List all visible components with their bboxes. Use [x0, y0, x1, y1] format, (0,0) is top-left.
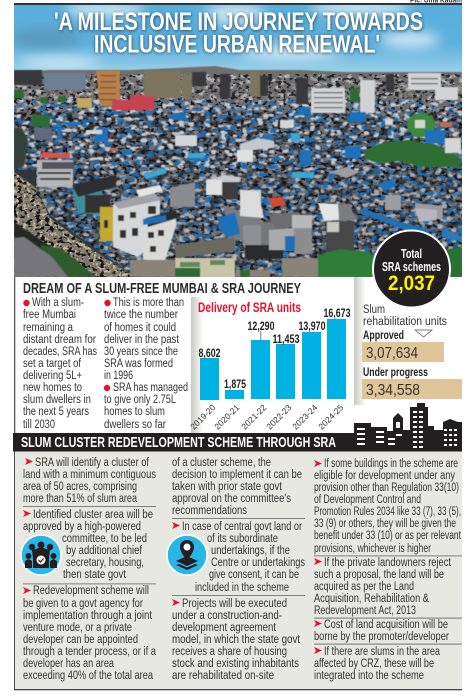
- bar values: [198, 308, 350, 391]
- column 1 text: through a tender process, or if a: [23, 646, 156, 658]
- text block: delivery so far: twice the number: [104, 309, 178, 321]
- column 2 text: undertakings, if the: [211, 545, 290, 557]
- arrow bullet: [25, 458, 33, 465]
- icon: city skyline: [354, 403, 462, 452]
- photo: Mumbai slum skyline: [10, 0, 462, 278]
- blue patches: [57, 107, 445, 165]
- year labels: 2024-25: [316, 402, 346, 431]
- column 1 text: venture mode, or a private: [23, 622, 132, 634]
- text block: slum-free target: distant dream for: [23, 334, 96, 346]
- stat: under progress: [362, 367, 462, 399]
- text block: delivery so far: in 1996: [104, 370, 133, 382]
- column 2 text: give consent, it can be: [209, 569, 299, 581]
- stat: approved: 3,07,634: [366, 345, 418, 362]
- column 1 text: [23, 457, 156, 682]
- column 1 text: implementation through a joint: [23, 610, 153, 622]
- column 3 text: Acquisition, Rehabilitation &: [314, 593, 429, 605]
- column 1 text: committee, to be led: [62, 533, 147, 545]
- text block: slum-free target: the next 5 years: [23, 406, 89, 418]
- bars: [200, 319, 346, 400]
- chart title: Delivery of SRA units: [198, 300, 301, 315]
- bar values: 8,602: [198, 348, 220, 360]
- column 2 text: taken with prior state govt: [172, 481, 283, 493]
- column 2 text: receives a share of housing: [172, 646, 287, 658]
- text block: delivery so far: [104, 297, 188, 431]
- column 1 text: be given to a govt agency for: [23, 598, 143, 610]
- text block: delivery so far: dwellers so far: [104, 419, 166, 431]
- text: slum rehabilitation units: Slum: [363, 304, 385, 316]
- column 1 text: developer can be appointed: [23, 634, 138, 646]
- column 2 text: Centre or undertakings: [211, 557, 305, 569]
- text block: delivery so far: deliver in the past: [104, 334, 180, 346]
- text block: delivery so far: homes to slum: [104, 406, 165, 418]
- column 1 text: Redevelopment scheme will: [33, 585, 149, 597]
- column 2 text: under a construction-and-: [172, 610, 282, 622]
- year labels: 2021-22: [239, 402, 269, 431]
- column 2 text: development agreement: [172, 622, 277, 634]
- column 3 text: [314, 458, 462, 682]
- bar values: 13,970: [298, 321, 326, 333]
- section header bar: [13, 433, 354, 452]
- column 3 text: acquired as per the Land: [314, 581, 414, 593]
- column 3 text: If there are slums in the area: [324, 646, 440, 658]
- year labels: 2019-20: [188, 402, 218, 431]
- column 1 text: area of 50 acres, comprising: [23, 481, 137, 493]
- bar values: 12,290: [248, 321, 274, 333]
- column 3 text: provisions, whichever is higher: [314, 543, 431, 555]
- column 2 text: included in the scheme: [195, 582, 289, 594]
- text block: slum-free target: remaining a: [23, 322, 73, 334]
- year labels: 2020-21: [212, 402, 242, 431]
- text: slum rehabilitation units: rehabilitation units: [363, 316, 447, 328]
- panel: scheme details background: [15, 451, 462, 689]
- text block: delivery so far: SRA has managed: [113, 382, 188, 394]
- column 2 text: of a cluster scheme, the: [172, 457, 271, 469]
- text block: slum-free target: [23, 297, 97, 431]
- column 3 text: Redevelopment Act, 2013: [314, 605, 416, 617]
- left bank: [14, 172, 135, 277]
- leader line: [260, 331, 262, 340]
- column 2 text: model, in which the state govt: [172, 634, 301, 646]
- main white buildings: [113, 197, 160, 257]
- column 1 text: more than 51% of slum area: [23, 493, 137, 505]
- distant towers: [14, 70, 394, 104]
- icon: down triangle: [415, 330, 432, 337]
- text block: delivery so far: This is more than: [113, 297, 184, 309]
- column 1 text: secretary, housing,: [66, 557, 144, 569]
- text block: slum-free target: delivering 5L+: [23, 370, 82, 382]
- badge: total SRA schemes: Total: [401, 247, 422, 261]
- column 1 text: developer has an area: [23, 658, 114, 670]
- panel shading: chart: [191, 297, 203, 433]
- year labels: [188, 402, 346, 431]
- column 2 text: decision to implement it can be: [172, 469, 302, 481]
- column 1 text: SRA will identify a cluster of: [35, 457, 150, 469]
- section header bar: SLUM CLUSTER REDEVELOPMENT SCHEME THROUGH SRA: [21, 434, 336, 451]
- column 2 text: are rehabilitated on-site: [172, 670, 274, 682]
- left frame line: [14, 277, 15, 690]
- icon: map pin: [167, 535, 207, 575]
- panel shading: units: [354, 277, 366, 405]
- column 3 text: of Development Control and: [314, 494, 421, 506]
- column 3 text: affected by CRZ, these will be: [314, 658, 434, 670]
- trees upper: [14, 88, 359, 127]
- text block: slum-free target: decades, SRA has: [23, 346, 97, 358]
- title: INCLUSIVE URBAN RENEWAL': [94, 31, 380, 59]
- heading: slum-free Mumbai: DREAM OF A SLUM-FREE MUMBAI & SRA JOURNEY: [23, 281, 301, 297]
- text block: slum-free target: till 2030: [23, 419, 55, 431]
- badge: total SRA schemes: [373, 230, 450, 308]
- text: slum rehabilitation units: [363, 304, 447, 328]
- bar chart: delivery of SRA units: [188, 300, 350, 431]
- column 1 text: by additional chief: [66, 545, 143, 557]
- text block: delivery so far: 30 years since the: [104, 346, 178, 358]
- year labels: 2022-23: [264, 402, 294, 431]
- bar values: 11,453: [272, 334, 300, 346]
- column 3 text: integrated into the scheme: [314, 670, 424, 682]
- title: [54, 8, 424, 59]
- stat: approved: [362, 330, 444, 362]
- column 2 text: In case of central govt land or: [182, 521, 302, 533]
- column 2 text: approval on the committee's: [172, 493, 291, 505]
- column 2 text: [172, 457, 305, 682]
- bar values: 16,673: [324, 308, 350, 320]
- column 2 text: stock and existing inhabitants: [172, 658, 299, 670]
- column 2 text: Projects will be executed: [182, 598, 287, 610]
- title: INCLUSIVE URBAN RENEWAL': [94, 30, 380, 58]
- column 1 text: exceeding 40% of the total area: [23, 670, 153, 682]
- column 2 text: recommendations: [172, 505, 247, 517]
- text block: slum-free target: new homes to: [23, 382, 82, 394]
- column 1 text: approved by a high-powered: [23, 521, 141, 533]
- bar values: 1,875: [224, 379, 246, 391]
- stat: approved: Approved: [363, 330, 404, 342]
- badge: total SRA schemes: SRA schemes: [382, 260, 441, 274]
- year labels: 2023-24: [290, 402, 320, 431]
- bottom border: [14, 689, 462, 690]
- column 1 text: Identified cluster area will be: [33, 509, 153, 521]
- text block: slum-free target: free Mumbai: [23, 309, 76, 321]
- column 2 text: of its subordinate: [207, 533, 278, 545]
- text block: slum-free target: slum dwellers in: [23, 394, 91, 406]
- text block: slum-free target: With a slum-: [32, 297, 84, 309]
- left cluster: [14, 128, 28, 170]
- text block: delivery so far: to give only 2.75L: [104, 394, 176, 406]
- stat: under progress: 3,34,558: [366, 382, 420, 399]
- icon: committee: [21, 535, 61, 575]
- badge: total SRA schemes: 2,037: [388, 272, 435, 295]
- stat: under progress: Under progress: [363, 367, 428, 379]
- text block: slum-free target: set a target of: [23, 358, 82, 370]
- text block: delivery so far: of homes it could: [104, 322, 176, 334]
- column 1 text: then state govt: [63, 569, 127, 581]
- column 1 text: land with a minimum contiguous: [23, 469, 156, 481]
- text block: delivery so far: SRA was formed: [104, 358, 173, 370]
